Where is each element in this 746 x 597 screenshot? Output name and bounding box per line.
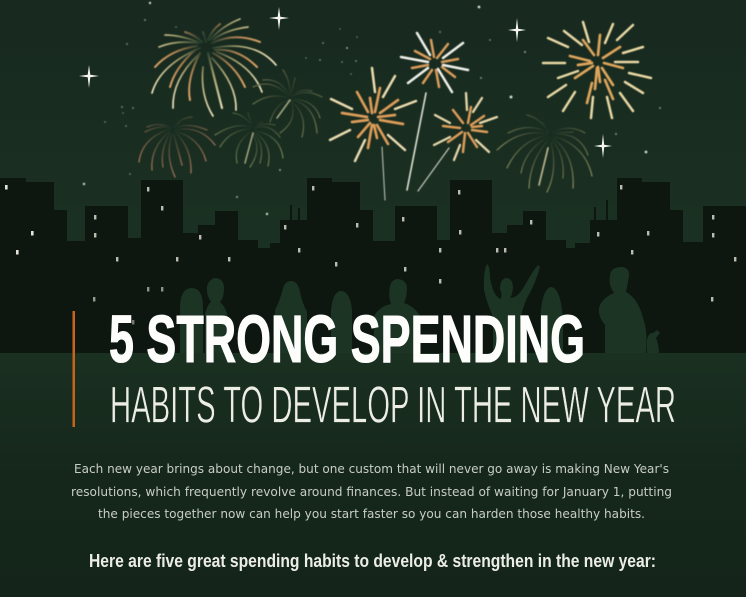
person: broad shoulders [374, 279, 420, 353]
person: long hair left [180, 288, 203, 353]
firework: large gold burst [543, 22, 651, 118]
person: arms raised [484, 264, 540, 353]
person: hair centre [275, 281, 307, 353]
firework: pale willow right [497, 115, 592, 192]
firework: orange burst centre [330, 68, 416, 161]
ground background [0, 353, 746, 597]
person: short hair [205, 278, 228, 353]
accent bar [72, 311, 75, 427]
firework: olive willow lower [215, 113, 283, 167]
intro paragraph [71, 462, 672, 521]
person: large parent [599, 267, 647, 353]
intro paragraph: the pieces together now can help you start faster so you can harden those healthy habits. [98, 507, 645, 521]
icon: sparkle stars [79, 7, 612, 158]
rocket trails [382, 93, 449, 200]
firework: white and orange burst [401, 33, 468, 92]
firework: olive willow upper [253, 70, 322, 137]
lit windows [5, 185, 736, 324]
city skyline silhouette [0, 178, 746, 353]
crowd silhouettes [180, 264, 660, 353]
person: child [647, 330, 660, 353]
firework: large willow [152, 19, 276, 116]
firework: small orange burst [434, 93, 497, 160]
title [109, 302, 676, 434]
subheading: Here are five great spending habits to develop & strengthen in the new year: [89, 550, 656, 571]
intro paragraph: resolutions, which frequently revolve around finances. But instead of waiting for January 1, putting [71, 485, 672, 499]
sky background [0, 0, 746, 353]
firework: red willow [139, 117, 215, 177]
person: ponytail [540, 287, 563, 353]
intro paragraph: Each new year brings about change, but one custom that will never go away is making New Year's [74, 462, 669, 476]
scattered star dots [83, 2, 661, 215]
person: far right of centre [331, 291, 352, 353]
